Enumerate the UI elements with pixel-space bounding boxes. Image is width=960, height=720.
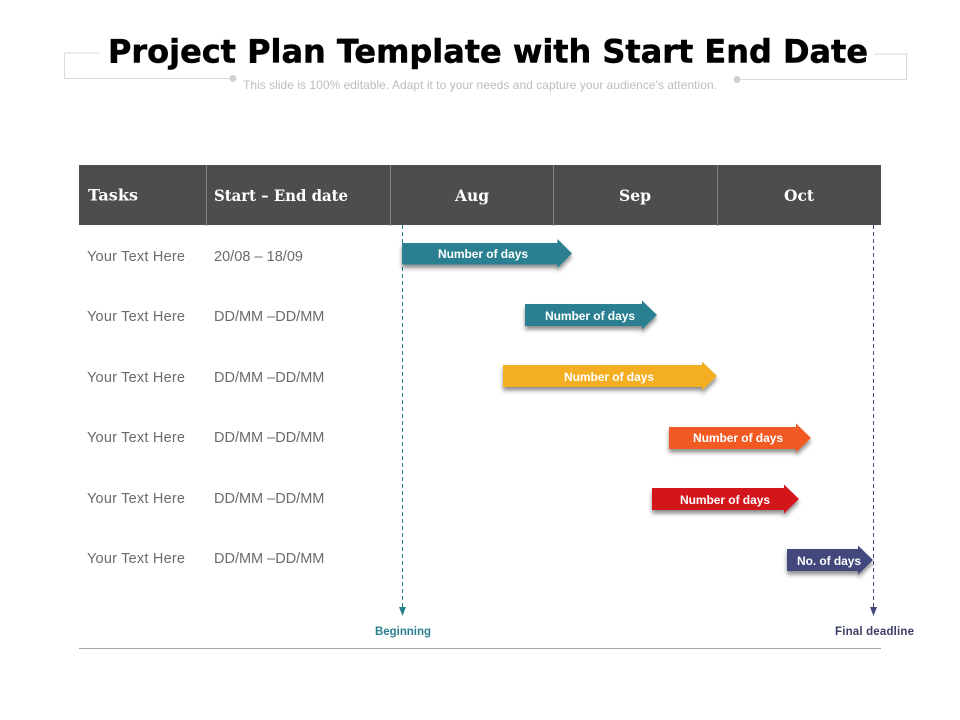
dates column [214,249,324,567]
task names column [87,249,185,567]
dates column: DD/MM –DD/MM [214,370,324,386]
header: Sep: Sep [619,186,651,205]
bottom rule [79,648,881,649]
arrow: task 6: No. of days [797,554,861,568]
arrow: task 4 [669,424,811,452]
arrow: task 5 [652,484,799,514]
dates column: 20/08 – 18/09 [214,249,303,265]
header: Start – End date: Start – End date [214,186,348,205]
title frame: left bracket [64,53,236,82]
table header [79,165,881,226]
header: Oct: Oct [784,186,815,205]
dates column: DD/MM –DD/MM [214,309,324,325]
arrow: task 4: Number of days [693,431,783,445]
subtitle: This slide is 100% editable. Adapt it to your needs and capture your audience's attention. [243,78,717,92]
arrow: task 2 [525,300,657,330]
arrow: task 3: Number of days [564,370,654,384]
task names column: Your Text Here [87,249,185,265]
label: Beginning: Beginning [375,626,431,638]
header: Tasks: Tasks [88,186,138,204]
arrow: task 5: Number of days [680,493,770,507]
title frame: right bracket [734,54,906,83]
final deadline marker line [870,225,877,616]
dates column: DD/MM –DD/MM [214,551,324,567]
beginning marker line [399,225,406,616]
label: Final deadline: Final deadline [835,626,914,638]
arrow: task 1 [402,239,572,268]
header: Aug: Aug [454,186,489,205]
title: Project Plan Template with Start End Date [108,32,868,70]
task names column: Your Text Here [87,430,185,446]
arrow: task 2: Number of days [545,309,635,323]
arrow: task 6 [787,546,873,574]
task names column: Your Text Here [87,309,185,325]
arrow: task 3 [503,362,717,390]
task names column: Your Text Here [87,551,185,567]
task names column: Your Text Here [87,491,185,507]
task names column: Your Text Here [87,370,185,386]
dates column: DD/MM –DD/MM [214,491,324,507]
arrow: task 1: Number of days [438,247,528,261]
dates column: DD/MM –DD/MM [214,430,324,446]
